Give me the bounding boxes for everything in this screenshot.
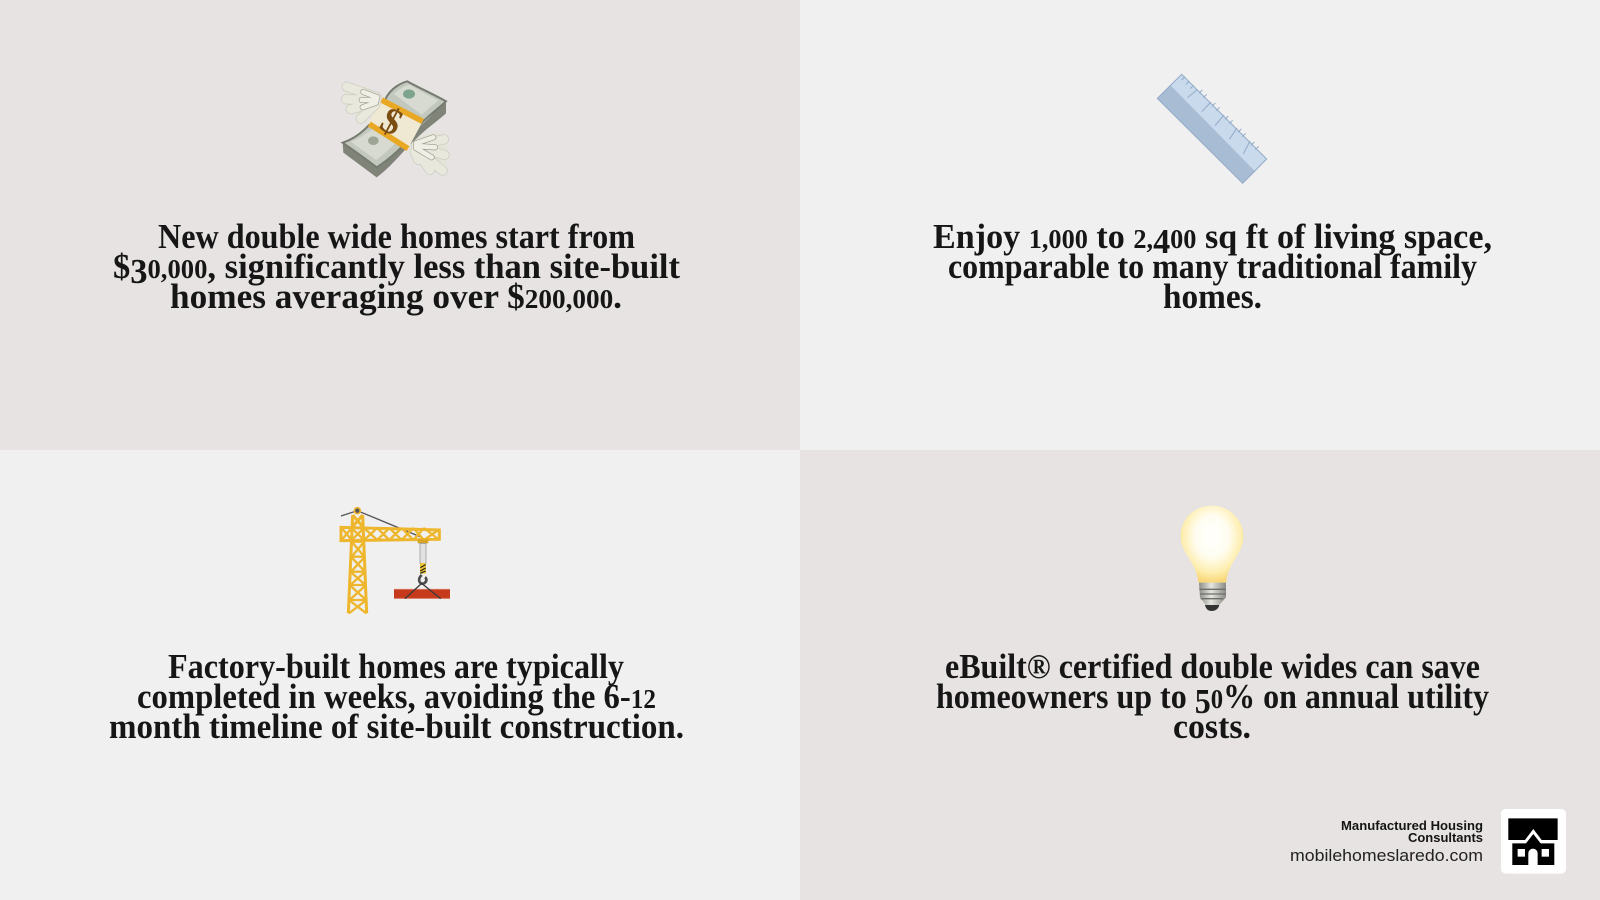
panel: utility savings — [800, 450, 1600, 900]
brand name — [1341, 818, 1483, 845]
text: cost: 0,000 — [148, 254, 207, 284]
text: space — [933, 217, 1492, 316]
text: utility savings: % on annual utility — [1223, 677, 1514, 716]
text: space: comparable to many traditional family — [948, 247, 1477, 286]
text: utility savings: 0 — [1211, 684, 1223, 714]
text: utility savings: homeowners up to — [936, 677, 1210, 716]
brand name: Manufactured Housing — [1341, 818, 1483, 833]
panel: build time — [0, 450, 800, 900]
icon: ruler — [1157, 74, 1267, 183]
text: utility savings: 5 — [1195, 682, 1211, 721]
text: cost: , significantly less than site-built — [207, 247, 687, 286]
text: cost: $ — [113, 247, 130, 286]
text: space: homes. — [1163, 277, 1262, 316]
text: utility savings: costs. — [1173, 707, 1251, 746]
text: utility savings — [936, 647, 1489, 746]
text: space: 4 — [1153, 222, 1170, 261]
text: build time: completed in weeks, avoiding the 6-12 — [137, 677, 656, 716]
text: cost: New double wide homes start from — [158, 217, 635, 256]
website: mobilehomeslaredo.com — [1290, 846, 1483, 865]
text: utility savings: eBuilt® certified double wides can save — [945, 647, 1480, 686]
logo — [1501, 809, 1566, 874]
text: space: 00 — [1170, 224, 1196, 254]
text: cost: homes averaging over $200,000. — [170, 277, 622, 316]
brand name: Consultants — [1408, 830, 1483, 845]
brand block — [1290, 809, 1566, 874]
panel: cost — [0, 0, 800, 450]
text: build time — [109, 647, 684, 746]
text: build time: Factory-built homes are typically — [168, 647, 624, 686]
text: space: Enjoy 1,000 to 2, — [933, 217, 1154, 256]
text: cost: 3 — [130, 252, 148, 291]
text: cost — [113, 217, 680, 316]
icon: building construction crane — [341, 508, 450, 613]
text: space: sq ft of living space, — [1205, 217, 1500, 256]
icon: light bulb — [1181, 506, 1243, 611]
icon: money with wings: $ — [373, 100, 409, 144]
text: build time: month timeline of site-built construction. — [109, 707, 684, 746]
icon: money with wings — [343, 81, 448, 177]
panel: space — [800, 0, 1600, 450]
